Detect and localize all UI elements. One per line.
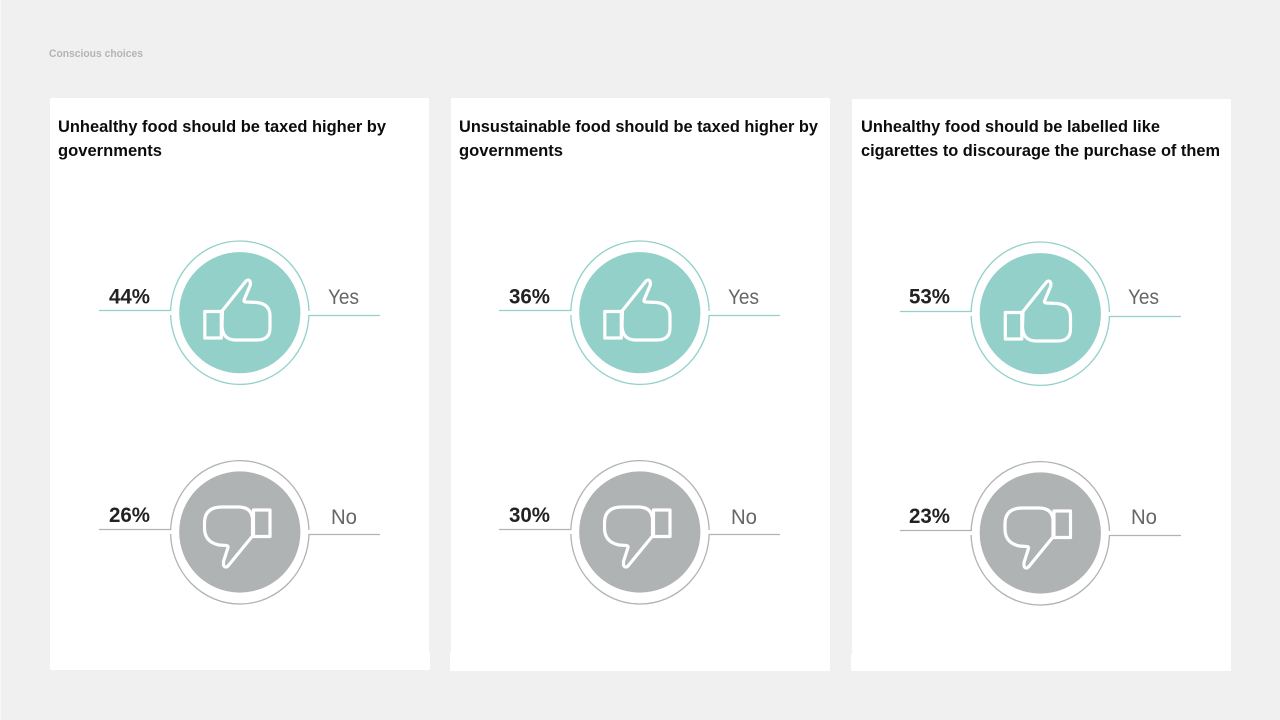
no result: 30% xyxy=(499,461,780,604)
label: Yes: Yes xyxy=(1128,286,1159,309)
yes result: 53% xyxy=(900,242,1181,385)
icon: thumbs up xyxy=(605,280,670,340)
icon: thumbs down xyxy=(604,507,670,567)
value: 26%: 26% xyxy=(109,504,150,527)
label: No: No xyxy=(331,506,357,529)
yes result: 36% xyxy=(499,241,780,384)
question heading 2: Unsustainable food should be taxed higher by xyxy=(459,118,819,136)
value: 23%: 23% xyxy=(909,505,950,528)
question heading 3 xyxy=(861,118,1220,160)
heading: Conscious choices: Conscious choices xyxy=(49,48,143,60)
value: 36%: 36% xyxy=(509,286,550,308)
label: No: No xyxy=(1131,506,1157,529)
question heading 3: Unhealthy food should be labelled like xyxy=(861,118,1160,136)
question heading 2: governments xyxy=(459,142,563,160)
value: 30%: 30% xyxy=(509,504,550,527)
panel: cigarette-style labelling xyxy=(851,99,1231,671)
question heading 3: cigarettes to discourage the purchase of them xyxy=(861,142,1220,160)
no result: 23% xyxy=(900,462,1181,605)
value: 44%: 44% xyxy=(109,286,150,308)
icon: thumbs down xyxy=(1005,508,1070,568)
panel: unsustainable food tax xyxy=(450,98,830,671)
question heading 1 xyxy=(58,118,387,160)
label: No: No xyxy=(731,506,757,529)
icon: thumbs down xyxy=(204,507,270,567)
yes result: 44% xyxy=(99,241,380,384)
question heading 1: Unhealthy food should be taxed higher by xyxy=(58,118,387,136)
label: Yes: Yes xyxy=(728,286,759,309)
question heading 1: governments xyxy=(58,142,162,160)
icon: thumbs up xyxy=(1005,281,1070,341)
icon: thumbs up xyxy=(205,280,270,340)
no result: 26% xyxy=(99,461,380,604)
panel: unhealthy food tax xyxy=(50,98,430,670)
value: 53%: 53% xyxy=(909,286,950,308)
question heading 2 xyxy=(459,118,819,160)
label: Yes: Yes xyxy=(328,286,359,309)
